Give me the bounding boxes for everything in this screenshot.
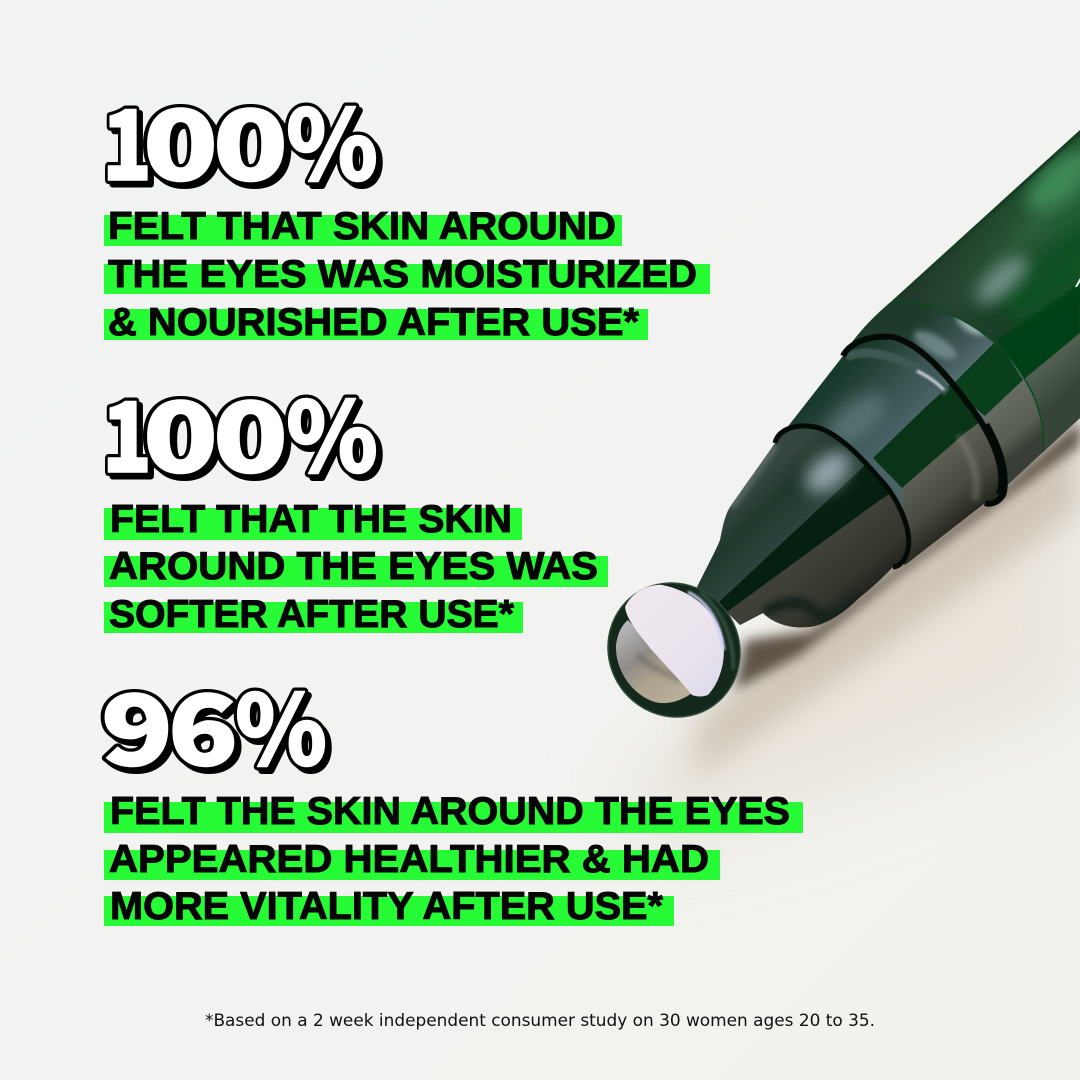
stat number: 100% bbox=[102, 67, 382, 212]
footnote: *Based on a 2 week independent consumer study on 30 women ages 20 to 35. bbox=[205, 1011, 875, 1030]
applicator ring bbox=[582, 557, 766, 743]
stat number: 96%: 6 bbox=[168, 652, 238, 793]
stat number: 100%: 0 bbox=[143, 359, 218, 500]
stat number: 100%: 1 bbox=[106, 71, 156, 212]
pen middle section bbox=[788, 334, 1008, 565]
stat block 3 bbox=[101, 652, 803, 928]
stat number: 100%: 0 bbox=[147, 71, 222, 212]
stat number: 100%: 0 bbox=[143, 67, 218, 208]
pen barrel bbox=[894, 130, 1080, 452]
stat number: 100%: % bbox=[290, 363, 382, 504]
stat number: 96%: % bbox=[235, 652, 327, 793]
pen tip neck bbox=[697, 423, 912, 628]
highlighted description bbox=[104, 205, 710, 344]
middle groove ring bbox=[775, 426, 909, 567]
highlighted description: MORE VITALITY AFTER USE* bbox=[110, 885, 664, 928]
stat number: 96%: 9 bbox=[105, 656, 177, 797]
stat number: 100%: 0 bbox=[213, 67, 288, 208]
stat number: 96%: 9 bbox=[101, 652, 173, 793]
roller ball head bbox=[582, 557, 766, 743]
white label tick bbox=[1075, 278, 1080, 287]
stat number: 100%: % bbox=[286, 67, 378, 208]
stat number: 100%: 0 bbox=[143, 67, 218, 208]
highlighted description bbox=[104, 498, 608, 636]
stat number: 100%: % bbox=[290, 71, 382, 212]
stat number: 100%: 1 bbox=[102, 67, 152, 208]
white cream on the roller bbox=[625, 585, 724, 696]
stat number: 96%: 6 bbox=[172, 656, 242, 797]
stat number: 100%: 1 bbox=[102, 359, 152, 500]
stat number: 100%: 0 bbox=[213, 359, 288, 500]
stat number: 96%: 6 bbox=[168, 652, 238, 793]
stat number: 100%: 0 bbox=[213, 359, 288, 500]
stat number: 100%: 1 bbox=[102, 67, 152, 208]
stat number: 100%: 0 bbox=[217, 363, 292, 504]
stat number: 96%: % bbox=[235, 652, 327, 793]
stat number: 100%: % bbox=[286, 359, 378, 500]
stat number: 96%: 9 bbox=[101, 652, 173, 793]
stat number: 100%: 0 bbox=[147, 363, 222, 504]
highlighted description: APPEARED HEALTHIER & HAD bbox=[109, 838, 709, 881]
highlighted description bbox=[104, 790, 803, 928]
highlighted description: & NOURISHED AFTER USE* bbox=[108, 301, 640, 344]
stat number: 100%: 0 bbox=[213, 67, 288, 208]
pen collar bbox=[852, 299, 1044, 485]
stat number: 100% bbox=[102, 359, 382, 504]
highlighted description: THE EYES WAS MOISTURIZED bbox=[108, 253, 697, 296]
stat number: 100%: % bbox=[286, 67, 378, 208]
stat number: 100%: 1 bbox=[106, 363, 156, 504]
stat number: 96% bbox=[101, 652, 331, 797]
product: green eye serum roller pen bbox=[607, 130, 1080, 718]
highlighted description: SOFTER AFTER USE* bbox=[109, 593, 515, 636]
highlighted description: AROUND THE EYES WAS bbox=[109, 545, 598, 588]
highlighted description: FELT THAT THE SKIN bbox=[110, 498, 512, 541]
stat number: 100%: % bbox=[286, 359, 378, 500]
stat number: 96%: % bbox=[239, 656, 331, 797]
stat number: 100%: 1 bbox=[102, 359, 152, 500]
highlighted description: FELT THE SKIN AROUND THE EYES bbox=[110, 790, 790, 833]
stat block 1 bbox=[102, 67, 710, 344]
stat number: 100%: 0 bbox=[217, 71, 292, 212]
metal roller ball bbox=[616, 620, 692, 703]
stat number: 100%: 0 bbox=[143, 359, 218, 500]
pen shadow on the surface bbox=[620, 415, 1080, 850]
highlighted description: FELT THAT SKIN AROUND bbox=[108, 205, 616, 248]
stat block 2 bbox=[102, 359, 608, 636]
collar groove ring bbox=[843, 337, 1005, 504]
